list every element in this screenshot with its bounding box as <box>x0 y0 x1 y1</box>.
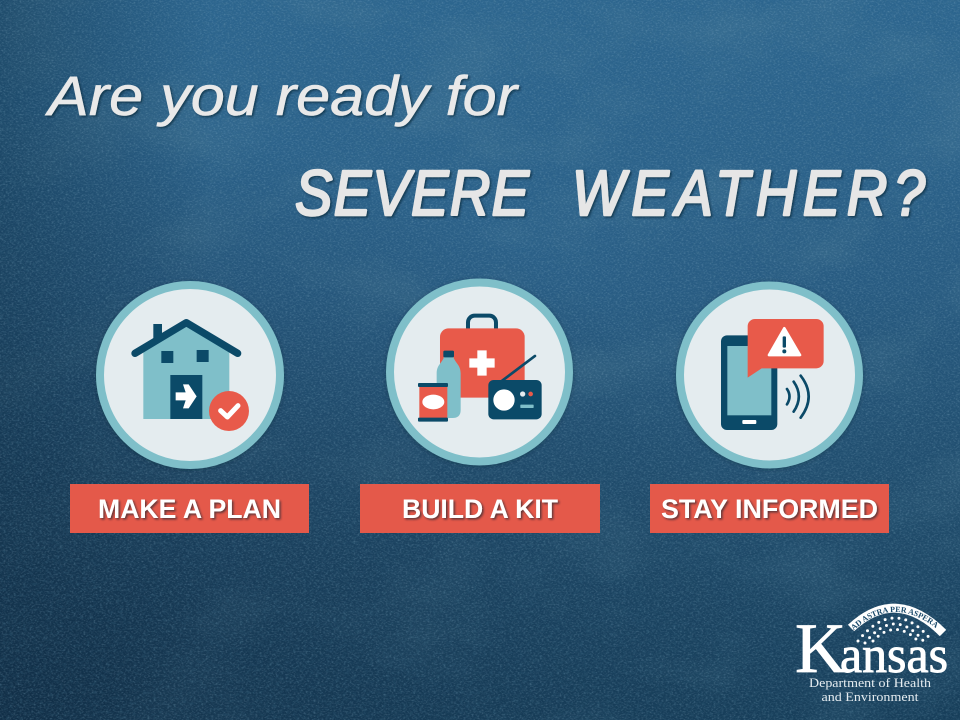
panel: build a kit <box>360 282 600 533</box>
logo banner arc <box>851 608 943 633</box>
icon: house with exit arrow and check <box>135 323 249 431</box>
icon badge circle <box>100 285 280 465</box>
logo department line 2: and Environment <box>822 689 919 704</box>
title word: weather: WEATHER? <box>572 156 925 229</box>
logo motto: AD ASTRA PER ASPERA <box>852 606 938 630</box>
title word: severe: SEVERE <box>295 156 530 229</box>
logo wordmark K: K <box>795 610 846 688</box>
icon badge circle <box>680 286 859 464</box>
logo stars <box>858 618 932 643</box>
icon: phone with alert bubble <box>721 319 824 430</box>
logo department line 1: Department of Health <box>809 675 932 690</box>
label: stay informed: STAY INFORMED <box>661 494 878 524</box>
label: make a plan: MAKE A PLAN <box>98 494 281 524</box>
panel: stay informed <box>650 286 889 533</box>
title: are you ready for: Are you ready for <box>45 64 520 127</box>
logo wordmark ansas: ansas <box>840 627 948 684</box>
logo: kansas department of health and environment <box>795 604 948 704</box>
label: make a plan <box>70 484 309 533</box>
panel: make a plan <box>70 285 309 533</box>
icon: first aid kit, water, can and radio <box>418 316 542 422</box>
label: stay informed <box>650 484 889 533</box>
label: build a kit: BUILD A KIT <box>402 494 558 524</box>
icon badge circle <box>390 282 569 462</box>
title: severe weather <box>295 156 925 229</box>
label: build a kit <box>360 484 600 533</box>
